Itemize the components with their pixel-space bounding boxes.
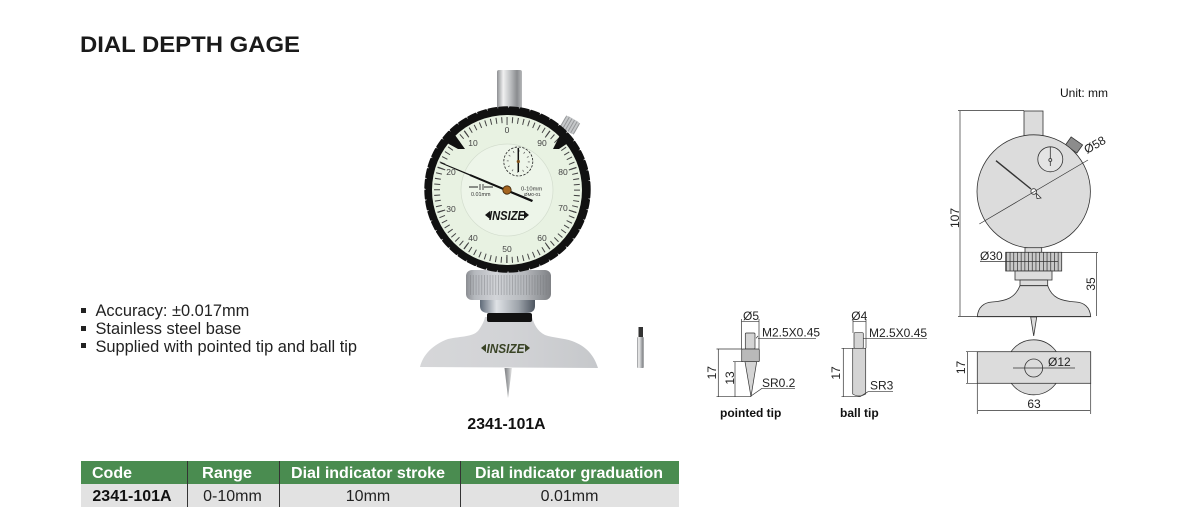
dial face [432,115,582,265]
table header: Range [202,465,252,482]
pointed tip labels: Ø5 [743,309,759,323]
zero adjust screw [560,115,580,135]
feature list [81,302,357,356]
bezel [426,108,589,271]
pointed tip labels: 17 [705,366,719,379]
dimension: diameter 12: Ø12 [1048,355,1071,369]
sub dial [504,147,533,176]
technical drawing: front and bottom views [948,110,1108,414]
drawing: bottom view [977,340,1091,395]
base [420,317,598,368]
dial numbers: 70 [558,203,568,213]
dial numbers: 20 [446,167,456,177]
product photo: dial depth gage [420,70,644,398]
dial numbers: 60 [537,233,547,243]
stem [497,70,522,110]
table row [81,484,679,507]
ball tip thread [854,333,863,348]
dial slots [447,135,568,149]
dimension: diameter 58: Ø58 [1082,133,1108,157]
pointed tip dimensions [716,319,816,397]
pointed tip knurl [742,349,759,362]
ball tip labels [829,309,927,392]
pointed tip label: pointed tip [720,406,781,420]
dial small print: 0-10mm [521,186,542,192]
table header: Dial indicator stroke [291,465,445,482]
bullet: tips: Supplied with pointed tip and ball tip [96,338,357,356]
dial small print: ØM0-01 [524,192,541,197]
neck under knob [480,296,535,313]
pointed tip [504,368,512,398]
table row: 0-10mm [203,488,262,505]
table header: Dial indicator graduation [475,465,663,482]
needle [440,162,533,202]
dial numbers: 0 [505,125,510,135]
lower knurled knob [466,270,551,300]
pointed tip labels: SR0.2 [762,376,796,390]
pointed tip labels [705,309,820,390]
drawing: sub dial [1038,147,1063,172]
dimension: 63 [977,383,1091,414]
dimension: diameter 12 [1013,355,1075,369]
drawing: needle [996,161,1041,198]
table row: 10mm [346,488,390,505]
technical drawing: pointed tip [705,309,820,397]
pointed tip thread [745,333,755,349]
drawing: tip [1031,317,1037,336]
drawing: screw [1065,137,1083,153]
ball tip labels: Ø4 [851,309,868,323]
unit note: Unit: mm [1060,86,1108,100]
table row: 0.01mm [541,488,598,505]
ball tip labels: 17 [829,366,843,380]
technical drawing: ball tip [829,309,927,397]
drawing: stem [1024,111,1043,137]
dimension: 35 [1061,252,1098,316]
dial numbers: 10 [468,138,478,148]
drawing: dial circle [977,135,1090,248]
dial small print: 0.01mm [471,192,491,198]
dimension: diameter 58 [979,133,1108,224]
dimension: 107 [948,110,1090,316]
dimension: 17: 17 [954,361,968,374]
title: DIAL DEPTH GAGE [80,32,300,57]
dial numbers: 90 [537,138,547,148]
dimension: diameter 30: Ø30 [980,249,1003,263]
drawing: base [977,286,1091,317]
dial small print [469,184,542,198]
dimension: 35: 35 [1084,277,1098,291]
table row: 2341-101A [92,488,172,505]
table header [81,461,679,484]
dial ticks [437,120,577,260]
specification table [81,461,679,507]
ball tip labels: M2.5X0.45 [869,326,927,340]
ball tip labels: SR3 [870,378,894,392]
bullet: accuracy: Accuracy: ±0.017mm [96,302,249,320]
black collar [487,313,532,322]
dial numbers: 40 [468,233,478,243]
pointed tip labels: 13 [723,371,737,385]
dimension: 17 [954,352,977,383]
dial numbers [446,125,568,254]
dial numbers: 30 [446,204,456,214]
ball tip accessory [637,327,644,368]
dial numbers: 80 [558,167,568,177]
pointed tip labels: M2.5X0.45 [762,326,820,340]
product code caption: 2341-101A [467,416,546,433]
table header: Code [92,465,132,482]
dimension: 107: 107 [948,208,962,228]
dial numbers: 50 [502,244,512,254]
pointed tip cone [745,362,757,397]
ball tip body [853,348,866,396]
dimension: diameter 30 [980,249,1058,263]
dimension: 63: 63 [1027,397,1041,411]
ball tip label: ball tip [840,406,879,420]
ball tip dimensions [842,319,927,397]
dial logo: INSIZE [489,208,525,223]
base logo: INSIZE [486,341,525,356]
bullet: base: Stainless steel base [96,320,241,338]
drawing: neck and knurled ring [1006,248,1062,286]
